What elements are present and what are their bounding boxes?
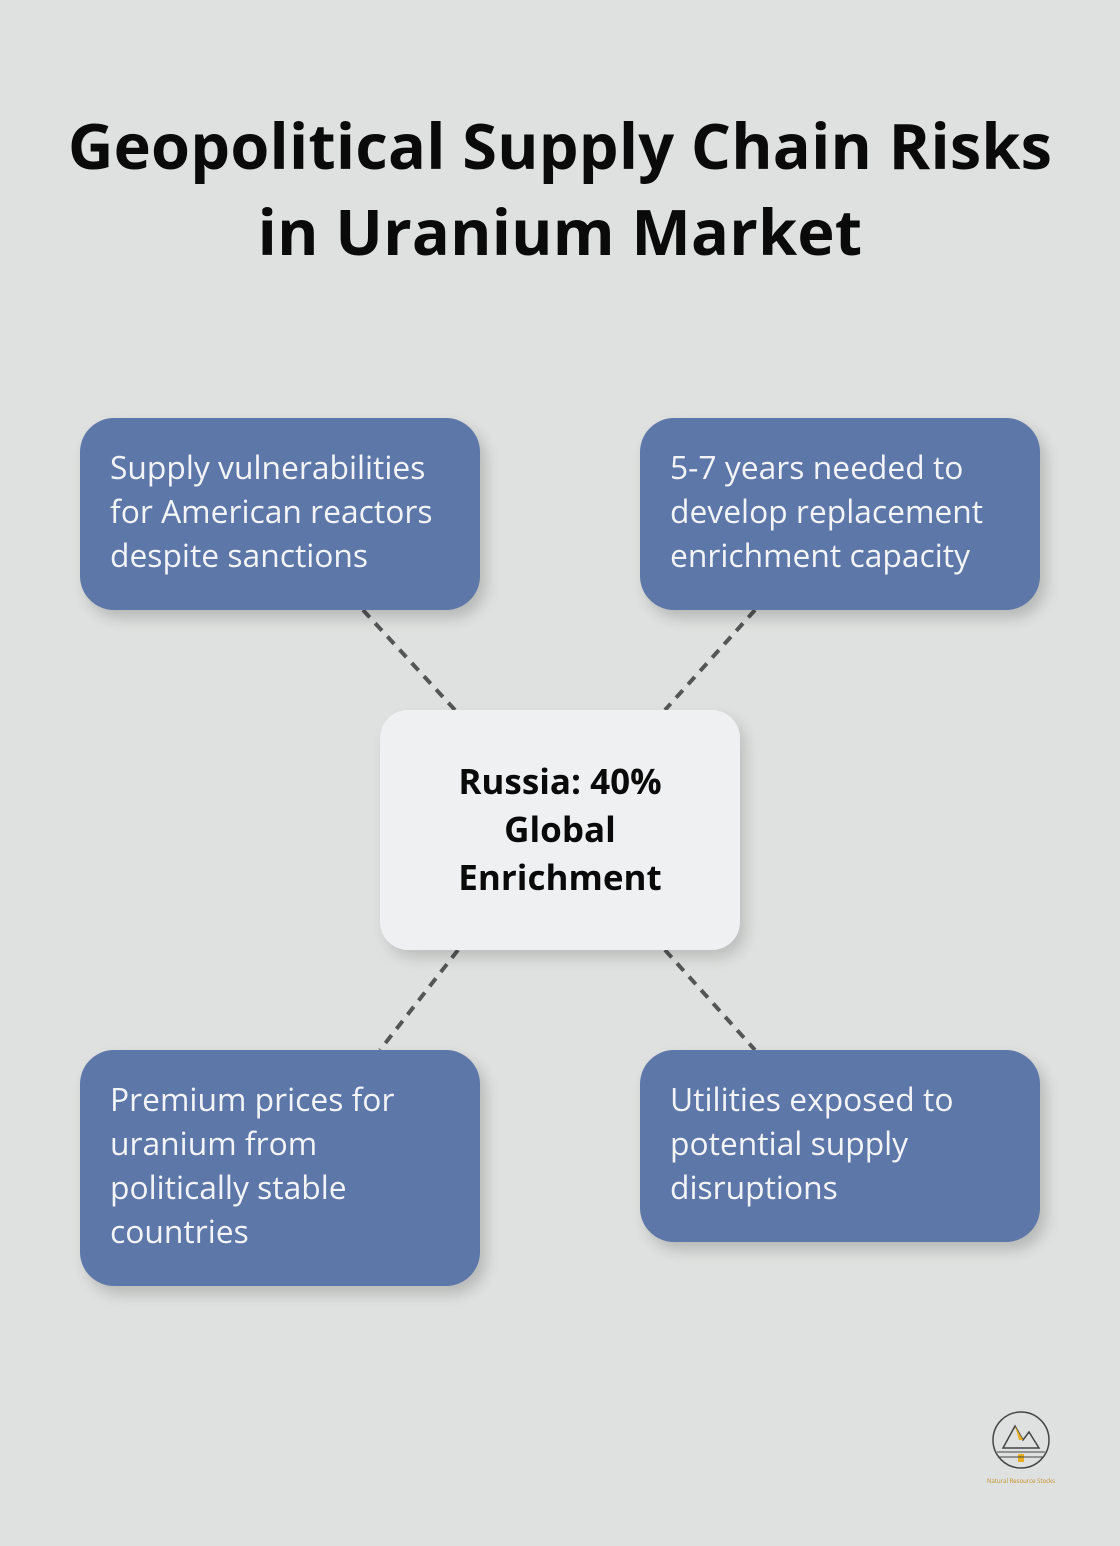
box: supply vulnerabilities: despite sanctions xyxy=(110,534,368,577)
title: Geopolitical Supply Chain Risks xyxy=(68,103,1052,188)
box: utilities exposed xyxy=(640,1050,1040,1242)
box: premium prices: politically stable xyxy=(110,1166,347,1209)
box: supply vulnerabilities xyxy=(80,418,480,610)
box: utilities exposed: disruptions xyxy=(670,1166,838,1209)
title xyxy=(68,103,1052,274)
box: utilities exposed: potential supply xyxy=(670,1122,908,1165)
box: premium prices: uranium from xyxy=(110,1122,317,1165)
box: 5-7 years: 5-7 years needed to xyxy=(670,446,963,489)
center: Russia: Russia: 40% xyxy=(458,758,662,805)
box: premium prices: countries xyxy=(110,1210,249,1253)
box: premium prices xyxy=(80,1050,480,1286)
title: in Uranium Market xyxy=(258,189,862,274)
box: utilities exposed: Utilities exposed to xyxy=(670,1078,954,1121)
center: Russia: Global xyxy=(504,806,616,853)
logo xyxy=(987,1411,1055,1485)
box: 5-7 years: enrichment capacity xyxy=(670,534,970,577)
box: supply vulnerabilities: Supply vulnerabilities xyxy=(110,446,425,489)
box: 5-7 years xyxy=(640,418,1040,610)
center: Russia: Enrichment xyxy=(458,854,662,901)
box: premium prices: Premium prices for xyxy=(110,1078,394,1121)
box: 5-7 years: develop replacement xyxy=(670,490,983,533)
text: Natural Resource Stocks xyxy=(987,1477,1055,1485)
center: Russia xyxy=(380,710,740,950)
box: supply vulnerabilities: for American reactors xyxy=(110,490,433,533)
